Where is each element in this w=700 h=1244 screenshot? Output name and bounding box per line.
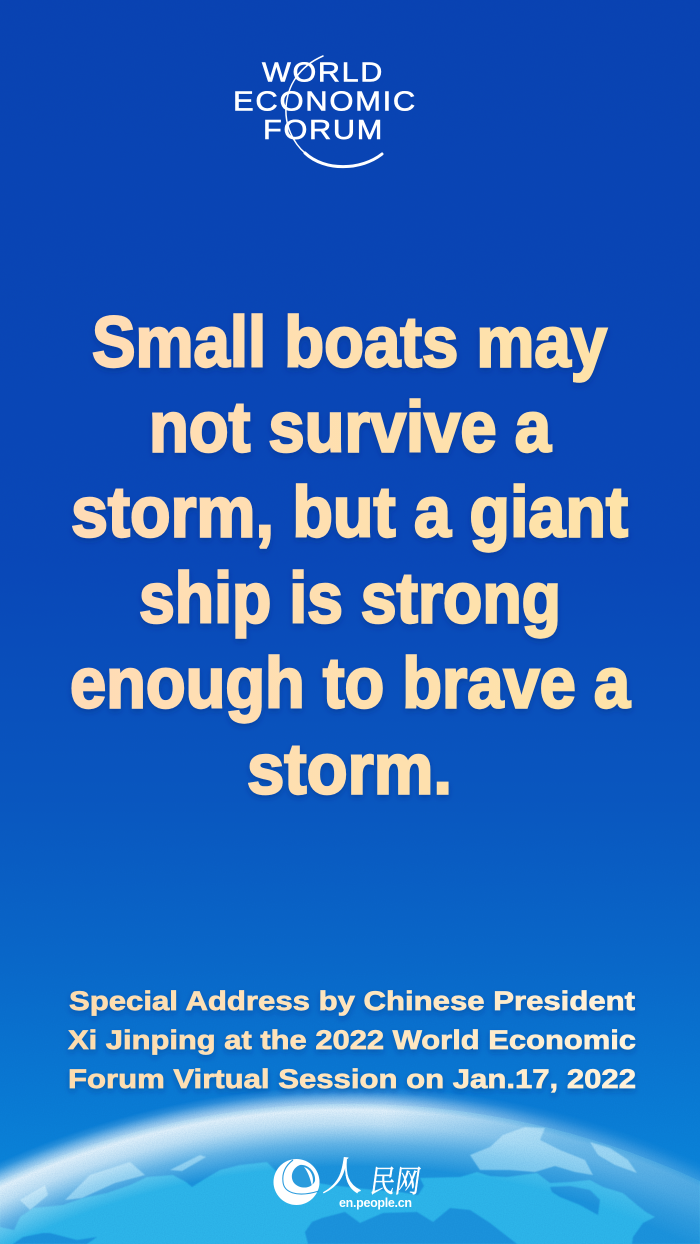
- headline quote: not survive a: [149, 388, 551, 468]
- logo Chinese name: 民网: [368, 1156, 424, 1201]
- headline quote: enough to brave a: [70, 644, 630, 724]
- headline quote: [70, 304, 630, 810]
- globe illustration: [0, 1080, 700, 1244]
- headline quote: storm.: [247, 730, 452, 810]
- headline quote: ship is strong: [139, 560, 561, 638]
- logo wordmark: [233, 56, 417, 145]
- atmosphere glow arc: [0, 1080, 700, 1244]
- logo URL: en.people.cn: [339, 1196, 412, 1210]
- logo emblem: [274, 1159, 320, 1205]
- logo Chinese name: 人: [320, 1145, 368, 1202]
- attribution text: [68, 986, 636, 1094]
- logo Chinese name: [320, 1145, 424, 1202]
- attribution text: Forum Virtual Session on Jan.17, 2022: [68, 1064, 636, 1094]
- logo: People's Daily Online: [274, 1145, 424, 1210]
- headline quote: storm, but a giant: [71, 474, 628, 552]
- logo wordmark: ECONOMIC: [233, 86, 417, 116]
- lake: [550, 1186, 600, 1215]
- logo wordmark: WORLD: [262, 56, 384, 88]
- headline quote: Small boats may: [92, 304, 607, 382]
- bottom left sea: [13, 1233, 97, 1244]
- logo arc: [286, 56, 382, 167]
- globe land and water: [0, 1090, 700, 1244]
- northern ocean: [0, 1090, 700, 1244]
- pale arctic islands: [20, 1127, 637, 1210]
- attribution text: Xi Jinping at the 2022 World Economic: [68, 1025, 636, 1055]
- bottom centre ocean: [305, 1208, 517, 1244]
- logo: World Economic Forum: [233, 56, 417, 167]
- attribution text: Special Address by Chinese President: [69, 986, 635, 1016]
- logo wordmark: FORUM: [263, 114, 384, 145]
